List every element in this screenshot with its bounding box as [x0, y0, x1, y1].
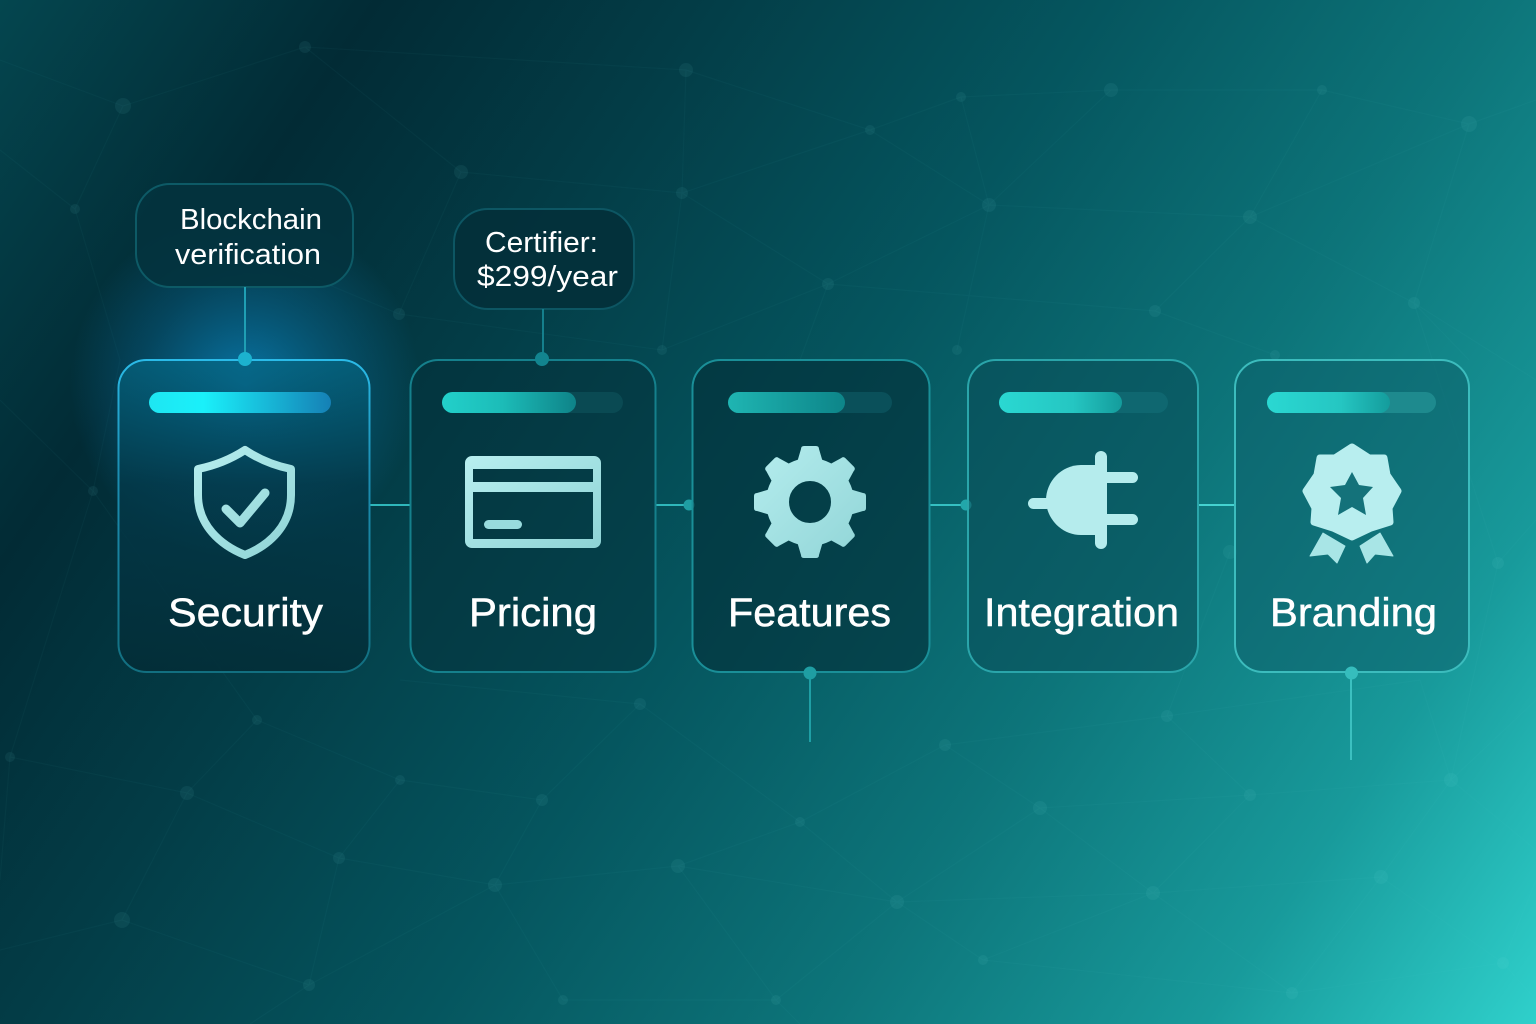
- callout: blockchain verification: [136, 184, 353, 287]
- label: Features: [728, 591, 891, 635]
- connector dot and stem: [1345, 666, 1358, 760]
- icon: shield with check: [198, 450, 291, 555]
- progress bar: [442, 392, 623, 413]
- panel: integration: [968, 360, 1198, 672]
- progress bar: [999, 392, 1168, 413]
- progress bar: [728, 392, 892, 413]
- panel: security: [118, 352, 370, 672]
- icon: gear: [754, 446, 866, 558]
- callout: blockchain verification: verification: [175, 239, 321, 271]
- callout: blockchain verification: Blockchain: [180, 204, 322, 236]
- icon: plug: [1028, 451, 1138, 549]
- connector: features to integration: [930, 500, 972, 510]
- callout line: pricing: [542, 309, 544, 359]
- label: Integration: [984, 591, 1179, 635]
- connector dot and stem: [804, 666, 816, 742]
- panel: branding: [1235, 360, 1469, 760]
- connector: security to pricing: [370, 504, 410, 506]
- progress bar: [149, 392, 331, 413]
- label: Pricing: [469, 591, 597, 635]
- progress bar: [1267, 392, 1436, 413]
- connector dot: [535, 352, 549, 366]
- icon: award badge: [1306, 447, 1398, 563]
- panel: pricing: [410, 352, 656, 672]
- callout line: security: [244, 287, 246, 359]
- callout: certifier price: [454, 209, 634, 309]
- callout: certifier price: $299/year: [477, 261, 618, 293]
- panel: features: [692, 360, 930, 742]
- connector: pricing to features: [656, 500, 694, 510]
- callout: certifier price: Certifier:: [485, 227, 598, 259]
- connector: integration to branding: [1199, 504, 1235, 506]
- blue glow behind security card: [60, 200, 430, 570]
- connector dot: [238, 352, 252, 366]
- icon: credit card: [465, 456, 601, 548]
- label: Security: [168, 591, 323, 635]
- label: Branding: [1270, 591, 1437, 635]
